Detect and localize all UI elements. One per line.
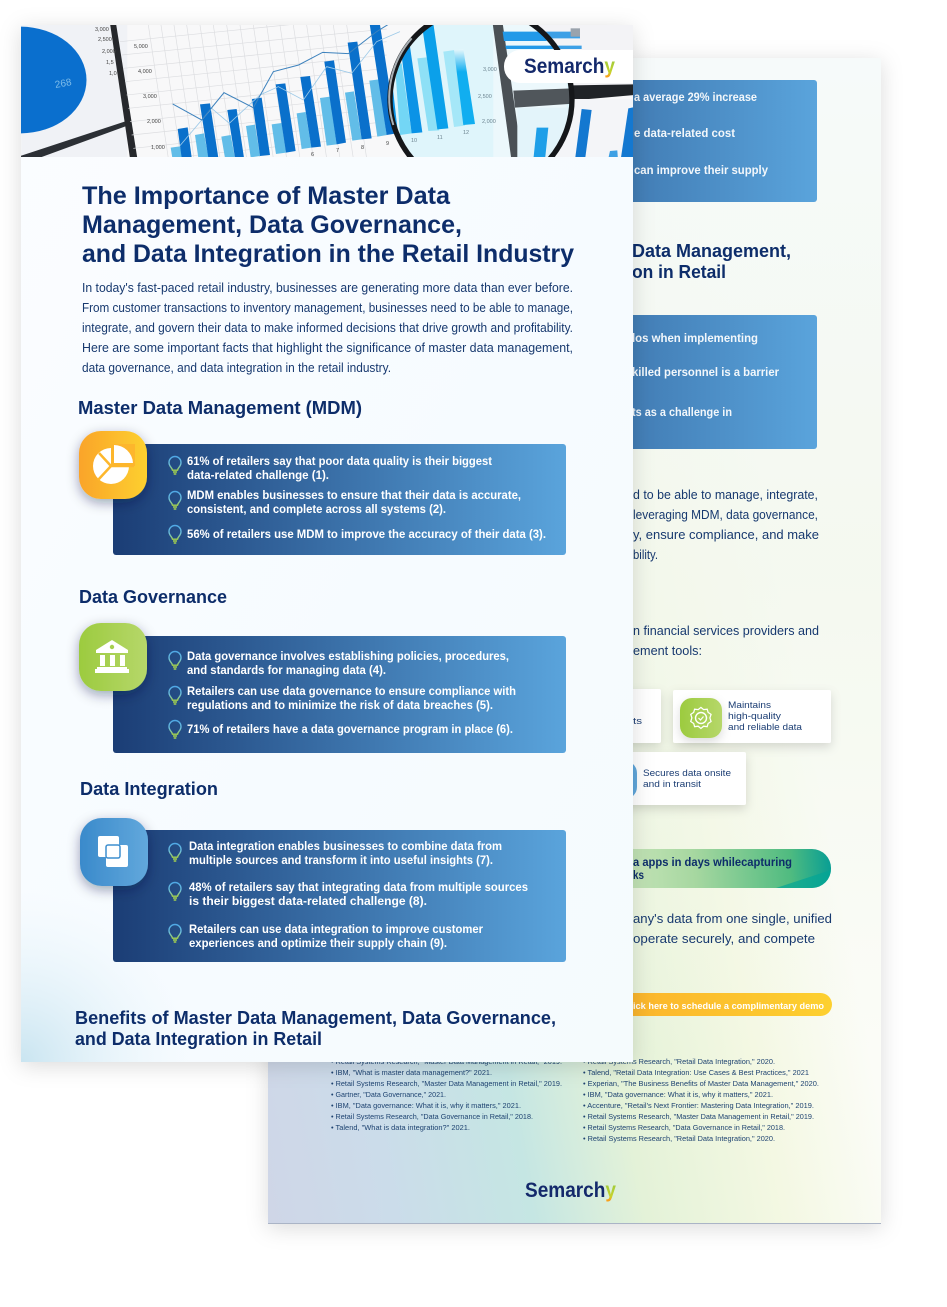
bullet: accurate data [169,488,521,516]
card: partial feature card: ts [633,716,642,727]
hero axis labels: 12 [463,130,469,136]
references: right column [583,1057,819,1143]
hero axis labels: 5,000 [134,44,148,50]
back text: tools intro [633,624,819,658]
hero axis labels: 3,000 [483,67,497,73]
hero axis labels: 2,500 [478,94,492,100]
bullet: accurate data: consistent, and complete across all systems (2). [187,502,446,516]
back text: tools intro: n financial services providers and [633,624,819,638]
hero axis labels: 268 [54,77,73,91]
callout: green pill: ks [633,870,644,882]
hero axis labels: 7 [336,148,339,154]
bullet: accurate data: MDM enables businesses to ensure that their data is accurate, [187,488,521,502]
bullet: combine data [169,839,502,867]
bullet: poor data quality: 61% of retailers say that poor data quality is their biggest [187,454,492,468]
references: right column: • Retail Systems Research, "Retail Data Integration," 2020. [583,1057,775,1066]
references: right column: • Experian, "The Business Benefits of Master Data Management," 2020. [583,1079,819,1088]
panel: MDM [79,431,566,555]
bullet: compliance: Retailers can use data governance to ensure compliance with [187,684,516,698]
bullet: MDM accuracy: 56% of retailers use MDM to improve the accuracy of their data (3). [187,527,546,541]
hero axis labels: 6 [311,152,314,158]
back panel: benefits statistics: e data-related cost [634,128,735,140]
intro paragraph: Here are some important facts that highlight the significance of master data management, [82,341,573,355]
button: schedule a demo: ick here to schedule a complimentary demo [633,1001,824,1012]
back panel: benefits statistics: a average 29% increase [634,92,757,104]
back text: tools intro: ement tools: [633,644,702,658]
references: right column: • IBM, "Data governance: What it is, why it matters," 2021. [583,1090,773,1099]
bullet: policies: Data governance involves establishing policies, procedures, [187,649,509,663]
hero axis labels: 3,000 [143,94,157,100]
references: left column [331,1057,562,1132]
bullet: customer experience: experiences and optimize their supply chain (9). [189,936,447,950]
bullet: compliance [169,684,516,712]
back text: conclusion paragraph [633,488,819,562]
bullet: customer experience [169,922,483,950]
callout: green pill [500,849,831,888]
back heading: challenges: on in Retail [632,262,726,282]
references: right column: • Retail Systems Research, "Data Governance in Retail," 2018. [583,1123,785,1132]
icon: pie chart [79,431,147,499]
bullet: integration challenge [169,880,528,908]
hero axis labels: 2,500 [98,37,112,43]
back heading: challenges [632,241,791,282]
card: secures data: Secures data onsite [643,768,731,779]
hero axis labels: 10 [411,138,417,144]
back text: conclusion paragraph: bility. [633,548,658,562]
card: secures data: and in transit [643,779,701,790]
card: maintains high-quality data [673,690,831,743]
icon: quality badge [680,698,722,738]
icon: institution building [79,623,147,691]
hero axis labels: 11 [437,135,443,141]
back panel: benefits statistics [330,80,817,202]
logo: Semarchy footer: Semarchy [525,1178,616,1202]
logo tab: Semarchy [524,54,615,78]
left tablet with pie chart [21,26,126,157]
references: right column: • Talend, "Retail Data Integration: Use Cases & Best Practices," 2021 [583,1068,809,1077]
hero axis labels: 1,000 [151,145,165,151]
heading: Master Data Management: Master Data Management (MDM) [78,398,362,418]
icon: overlapping squares [80,818,148,886]
back text: about Semarchy: operate securely, and compete [633,932,815,946]
panel: back page [268,58,881,1224]
bullet: governance program: 71% of retailers have a data governance program in place (6). [187,722,513,736]
references: left column: • Retail Systems Research, "Master Data Management in Retail," 2019. [331,1079,562,1088]
bullet: integration challenge: 48% of retailers say that integrating data from multiple sources [189,880,528,894]
back text: conclusion paragraph: d to be able to manage, integrate, [633,488,818,502]
panel: Data Governance [79,623,566,753]
bullet: customer experience: Retailers can use data integration to improve customer [189,922,483,936]
card: secures data [560,752,746,805]
references: right column: • Accenture, "Retail's Next Frontier: Mastering Data Integration," 2019. [583,1101,814,1110]
panel: Data Integration [80,818,566,962]
title [82,182,574,268]
main chart on paper [110,15,400,162]
references: right column: • Retail Systems Research, "Master Data Management in Retail," 2019. [583,1112,814,1121]
card: maintains high-quality data: high-quality [728,711,781,722]
hero axis labels: 3,000 [95,27,109,33]
hero axis labels: 2,000 [102,49,116,55]
icon: security [595,761,637,799]
back text: about Semarchy [633,912,832,946]
card: maintains high-quality data: and reliable data [728,722,803,733]
card: partial feature card [500,689,661,743]
references: left column: • Gartner, "Data Governance," 2021. [331,1090,446,1099]
callout: green pill: a apps in days whilecapturing [633,857,792,869]
bullet: policies [169,649,509,677]
right papers and magnifying glass [387,25,633,157]
references: left column: • IBM, "Data governance: What it is, why it matters," 2021. [331,1101,521,1110]
references: left column: • Retail Systems Research, "Data Governance in Retail," 2018. [331,1112,533,1121]
hero axis labels: 1,0 [109,71,117,77]
title: and Data Integration in the Retail Industry [82,240,574,268]
hero axis labels: 1,5 [106,60,114,66]
logo tab [504,50,633,83]
hero axis labels: 8 [361,145,364,151]
intro paragraph: integrate, and govern their data to make informed decisions that drive growth and profitability. [82,321,573,335]
back text: conclusion paragraph: y, ensure compliance, and make [633,528,819,542]
references: left column: • Talend, "What is data integration?" 2021. [331,1123,470,1132]
hero axis labels [54,27,497,158]
hero image: bar charts and magnifying glass [21,25,633,157]
back heading: challenges: Data Management, [632,241,791,261]
back panel: benefits statistics: can improve their supply [634,165,769,177]
bullet: integration challenge: is their biggest data-related challenge (8). [189,894,427,908]
bullet: poor data quality: data-related challenge (1). [187,468,329,482]
bullet: combine data: multiple sources and transform it into useful insights (7). [189,853,493,867]
heading: Benefits: Benefits of Master Data Management, Data Governance, [75,1008,556,1028]
back text: about Semarchy: any's data from one single, unified [633,912,832,926]
intro paragraph: In today's fast-paced retail industry, businesses are generating more data than ever before. [82,281,573,295]
heading: Benefits [75,1008,556,1049]
bullet: poor data quality [169,454,492,482]
title: The Importance of Master Data [82,182,451,210]
heading: Benefits: and Data Integration in Retail [75,1029,322,1049]
back panel: challenges statistics: ts as a challenge in [632,407,732,419]
heading: Data Governance: Data Governance [79,587,227,607]
back panel: challenges statistics: killed personnel is a barrier [632,367,780,379]
intro paragraph: From customer transactions to inventory management, businesses need to be able to manage, [82,301,573,315]
intro paragraph [82,281,573,375]
bullet: policies: and standards for managing data (4). [187,663,386,677]
bullet: combine data: Data integration enables businesses to combine data from [189,839,502,853]
back panel: challenges statistics: los when implementing [632,333,758,345]
button: schedule a demo [500,993,832,1016]
references: left column: • IBM, "What is master data management?" 2021. [331,1068,492,1077]
hero axis labels: 2,000 [147,119,161,125]
hero axis labels: 4,000 [138,69,152,75]
title: Management, Data Governance, [82,211,462,239]
back text: conclusion paragraph: leveraging MDM, data governance, [633,508,818,522]
references: right column: • Retail Systems Research, "Retail Data Integration," 2020. [583,1134,775,1143]
card: maintains high-quality data: Maintains [728,700,771,711]
back panel: challenges statistics [330,315,817,449]
references: left column: • Retail Systems Research, "Master Data Management in Retail," 2019. [331,1057,562,1066]
hero axis labels: 2,000 [482,119,496,125]
heading: Data Integration: Data Integration [80,779,218,799]
panel: front page [0,8,664,1062]
hero axis labels: 9 [386,141,389,147]
bullet: compliance: regulations and to minimize the risk of data breaches (5). [187,698,493,712]
intro paragraph: data governance, and data integration in the retail industry. [82,361,391,375]
